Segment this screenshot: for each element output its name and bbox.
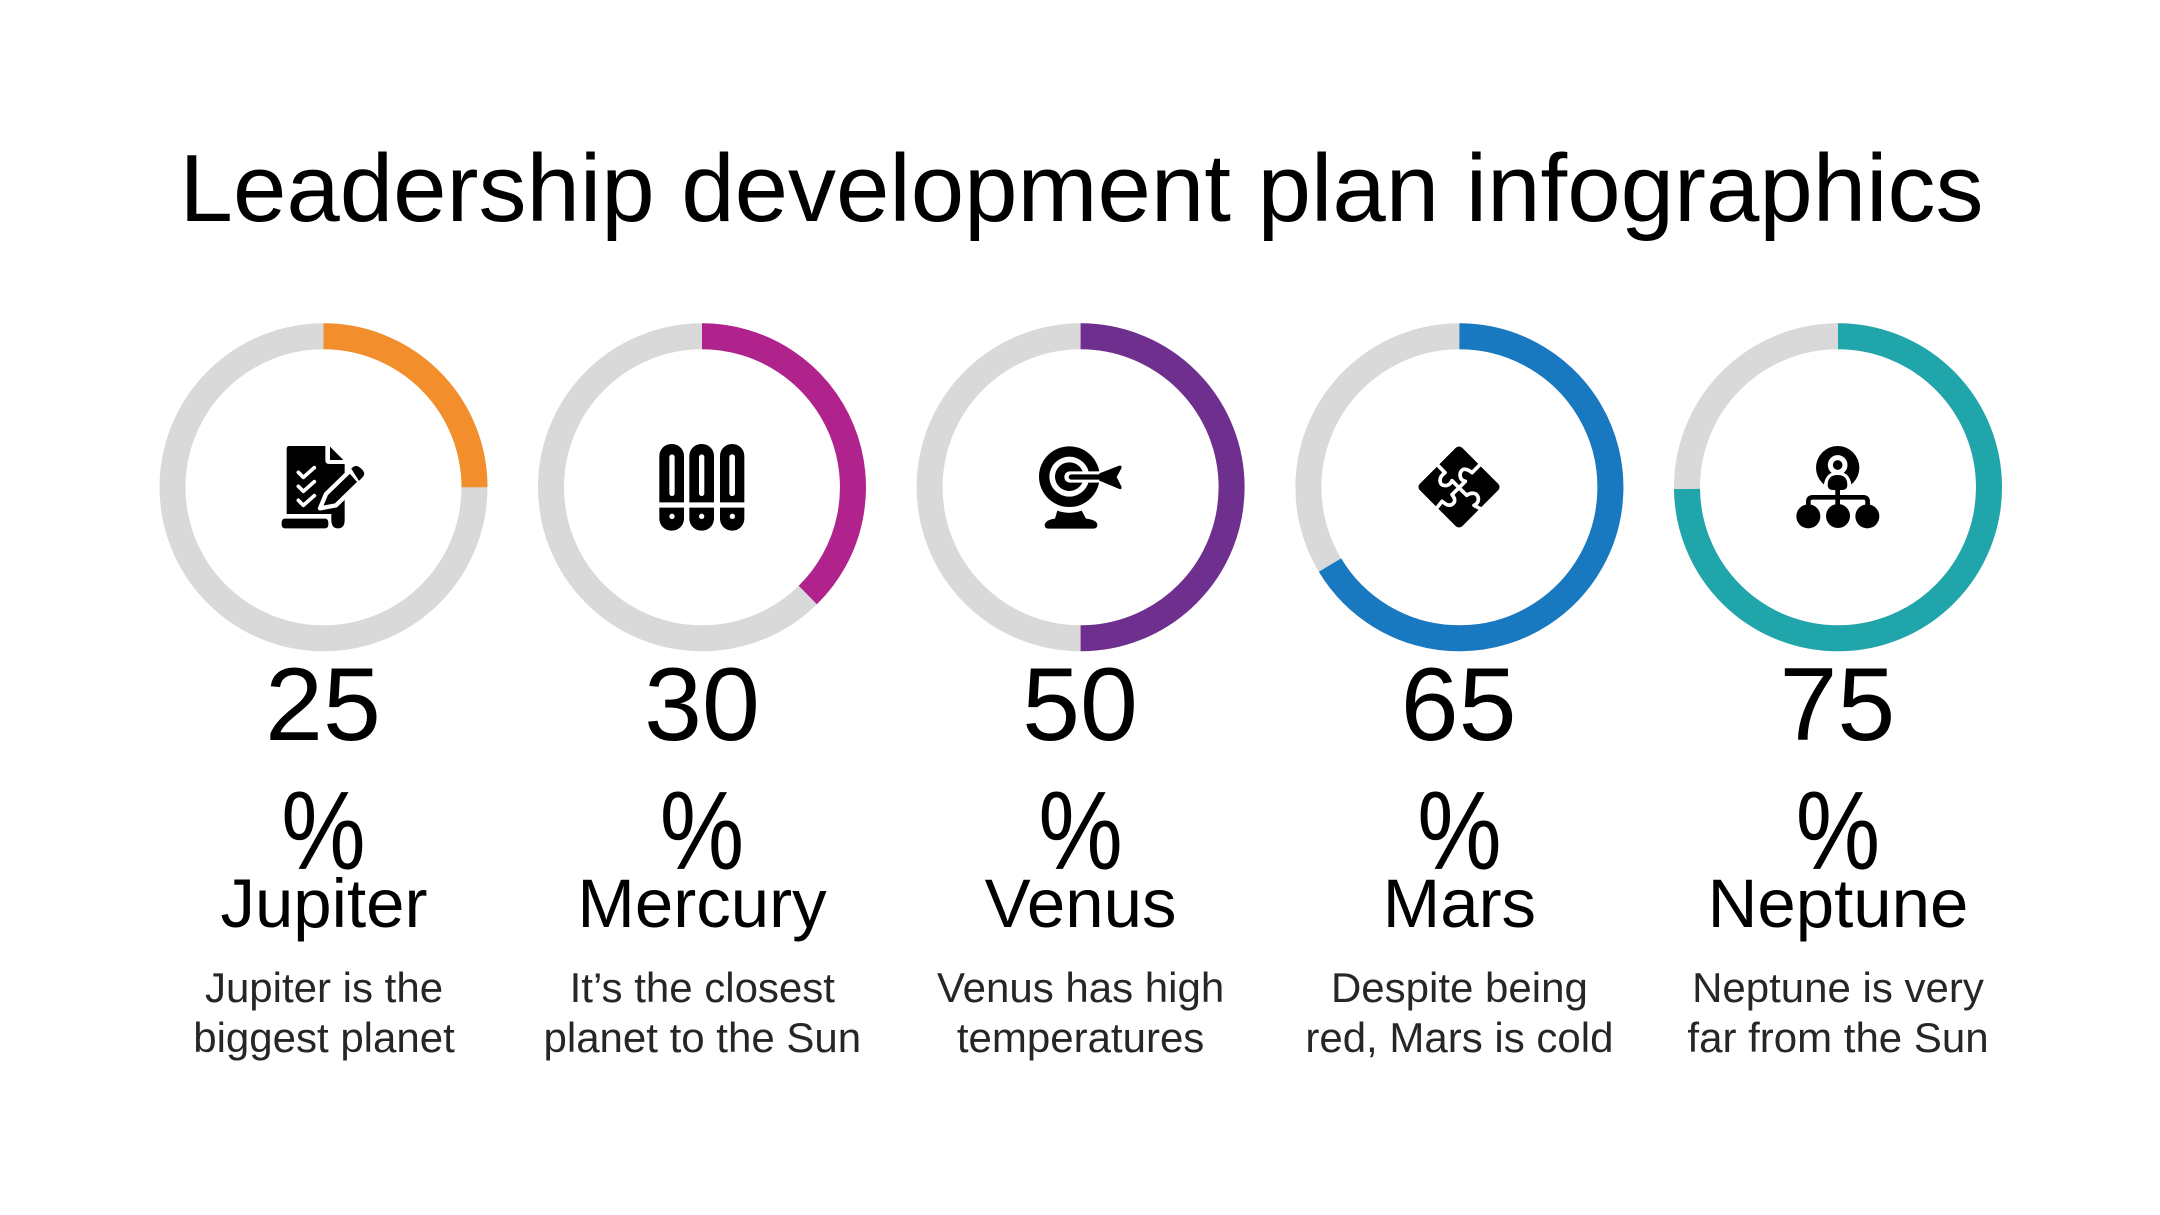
percentage: %	[1417, 769, 1502, 893]
donut chart: Jupiter 25%	[172, 336, 474, 638]
description: temperatures	[957, 1014, 1204, 1061]
donut chart: Neptune 75%	[1687, 336, 1989, 638]
percentage: %	[660, 769, 744, 893]
percentage: 65	[1401, 647, 1516, 763]
percentage	[265, 647, 381, 893]
name: Jupiter	[220, 865, 428, 942]
description: It’s the closest	[570, 964, 835, 1011]
panel: Mercury	[544, 336, 861, 1061]
description: biggest planet	[193, 1014, 455, 1061]
percentage: %	[1796, 769, 1880, 893]
panel: Venus	[930, 336, 1232, 1061]
icon: target with dart	[1039, 446, 1122, 529]
percentage	[1780, 647, 1895, 893]
icon: organization hierarchy	[1796, 446, 1879, 528]
name: Neptune	[1708, 865, 1968, 942]
donut chart: Mercury 30%	[551, 336, 853, 638]
percentage: 75	[1780, 647, 1895, 763]
description: Venus has high	[937, 964, 1224, 1011]
panel: Jupiter	[172, 336, 474, 1061]
percentage: %	[281, 769, 366, 893]
icon: puzzle pieces	[1417, 445, 1501, 529]
percentage: %	[1038, 769, 1123, 893]
description: Jupiter is the	[205, 964, 443, 1011]
icon: binders	[659, 444, 744, 531]
name: Venus	[985, 865, 1177, 942]
panel: Neptune	[1687, 336, 1989, 1061]
donut chart: Venus 50%	[930, 336, 1232, 638]
description: Despite being	[1331, 964, 1588, 1011]
icon: checklist with pencil	[282, 446, 364, 528]
title: Leadership development plan infographics	[180, 135, 1983, 242]
percentage: 30	[644, 647, 760, 763]
description: red, Mars is cold	[1305, 1014, 1613, 1061]
percentage	[644, 647, 760, 893]
percentage: 25	[265, 647, 381, 763]
percentage	[1022, 647, 1138, 893]
percentage	[1401, 647, 1516, 893]
name: Mars	[1383, 865, 1536, 942]
name: Mercury	[577, 865, 827, 942]
description: far from the Sun	[1687, 1014, 1989, 1061]
panel: Mars	[1305, 336, 1613, 1061]
donut chart: Mars 65%	[1308, 336, 1610, 638]
percentage: 50	[1022, 647, 1138, 763]
description: Neptune is very	[1692, 964, 1984, 1011]
description: planet to the Sun	[544, 1014, 861, 1061]
